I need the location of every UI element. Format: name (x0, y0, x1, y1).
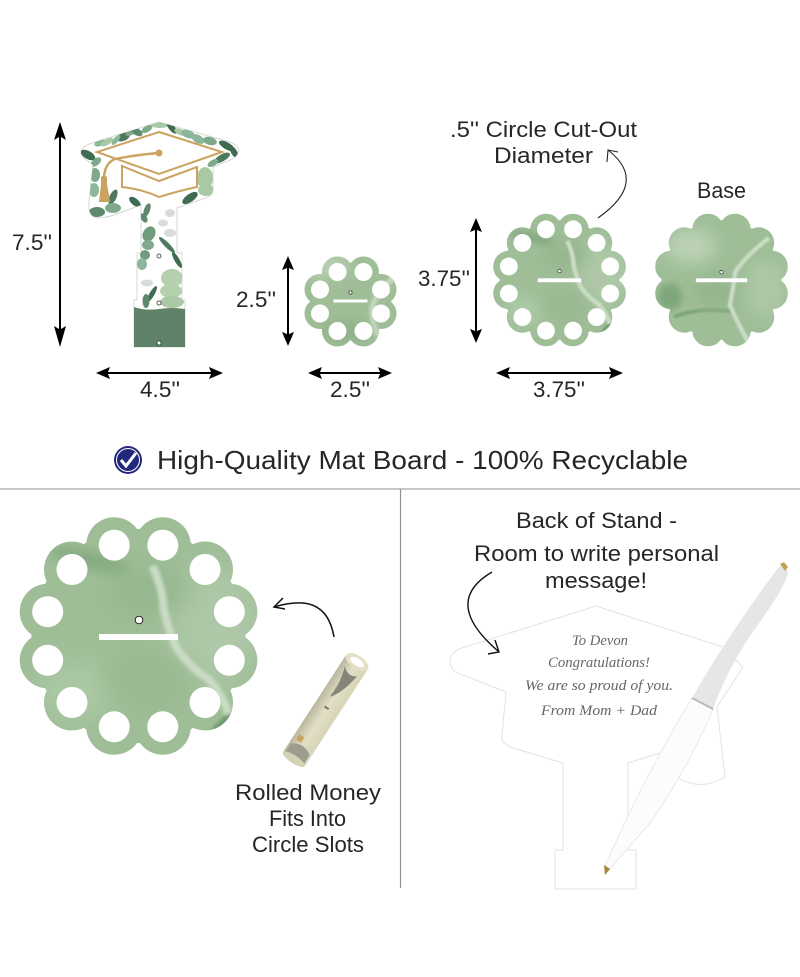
label: 4.5 inches: 4.5'' (140, 377, 180, 402)
handwritten message: We are so proud of you. (525, 678, 673, 694)
caption: rolled money: Circle Slots (252, 832, 364, 857)
heading: back of stand: Back of Stand - (516, 508, 677, 533)
blank stand outline (450, 606, 743, 889)
arrow: medium disc height (470, 218, 482, 343)
small holder disc (304, 256, 396, 346)
medium holder disc (490, 210, 629, 350)
label: circle cut-out diameter: .5'' Circle Cut-Out (450, 117, 637, 142)
recyclable statement (114, 445, 688, 475)
handwritten message (525, 633, 673, 719)
label: base: Base (697, 178, 746, 203)
caption: rolled money (235, 780, 381, 857)
pen (604, 562, 788, 875)
label: medium disc width: 3.75'' (533, 377, 585, 402)
heading: back of stand (474, 508, 719, 593)
heading: mat board: High-Quality Mat Board - 100% Recyclable (157, 445, 688, 475)
label: medium disc height: 3.75'' (418, 266, 470, 291)
caption: rolled money: Fits Into (269, 806, 346, 831)
arrow: to back of stand (468, 572, 499, 654)
heading: back of stand: message! (545, 568, 647, 593)
icon: check badge (114, 446, 142, 474)
arrow: cap height (54, 122, 66, 347)
arrow: cap width (96, 367, 223, 379)
panel: back of stand (450, 508, 788, 889)
label: small disc width: 2.5'' (330, 377, 370, 402)
label: small disc height: 2.5'' (236, 287, 276, 312)
green base block (134, 307, 185, 347)
infographic canvas (0, 121, 800, 890)
panel: product dimensions (12, 117, 791, 402)
arrow: to cut-out label (598, 150, 626, 218)
arrow: small disc height (282, 256, 294, 346)
gold cap outline (97, 132, 222, 197)
arrow: small disc width (308, 367, 392, 379)
panel: rolled money (14, 511, 381, 857)
gold tassel (99, 176, 110, 202)
handwritten message: Congratulations! (548, 655, 650, 671)
label: 7.5 inches: 7.5'' (12, 230, 52, 255)
handwritten message: From Mom + Dad (540, 703, 658, 719)
cap centerpiece (79, 120, 240, 347)
arrow: medium disc width (496, 367, 623, 379)
handwritten message: To Devon (572, 633, 628, 649)
large holder disc (14, 511, 264, 761)
icon: rolled dollar bill (281, 649, 371, 770)
label: diameter: Diameter (494, 143, 593, 168)
arrow: money to slot (274, 598, 334, 637)
base disc (652, 210, 791, 350)
caption: rolled money: Rolled Money (235, 780, 381, 805)
heading: back of stand: Room to write personal (474, 541, 719, 566)
